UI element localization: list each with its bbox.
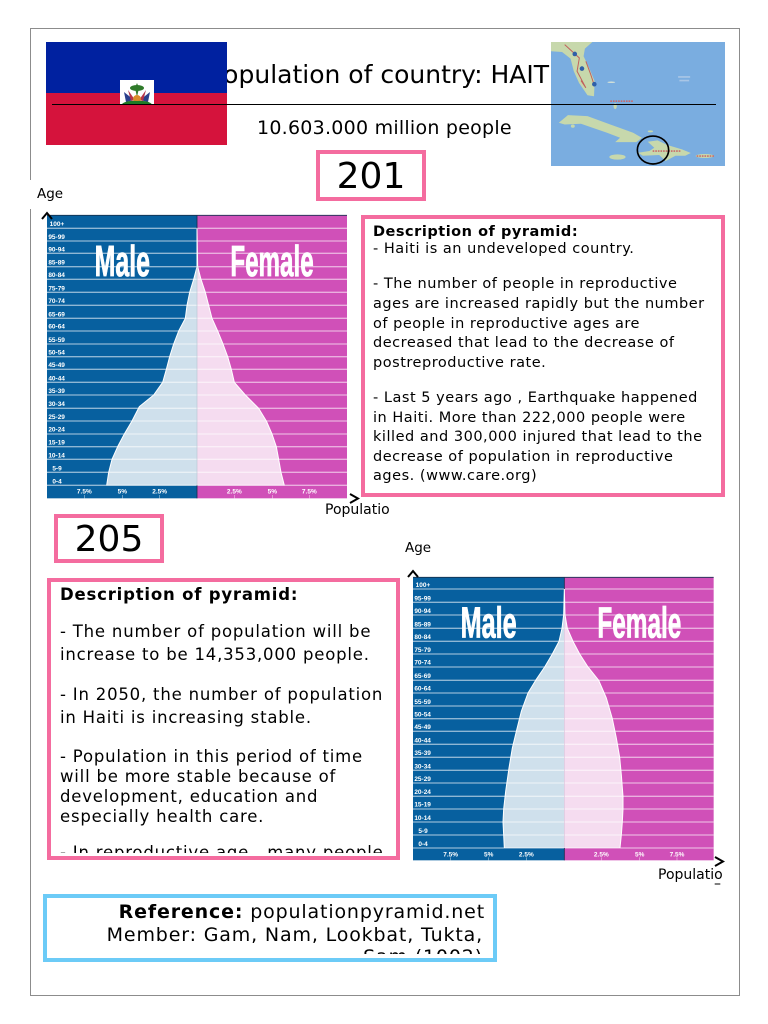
age labels: 25-29 bbox=[48, 414, 65, 421]
percent labels bbox=[77, 489, 317, 496]
percent labels: 2.5% bbox=[594, 852, 609, 859]
age labels: 70-74 bbox=[415, 660, 432, 667]
description paragraph: total bbox=[60, 622, 371, 664]
percent labels: 7.5% bbox=[302, 489, 317, 496]
arrow: population axis 2010 bbox=[350, 493, 360, 504]
age labels: 45-49 bbox=[48, 362, 65, 369]
description paragraph: earthquake: - Last 5 years ago , Earthquake happened bbox=[373, 390, 698, 406]
description paragraph: stability: will be more stable because of bbox=[60, 767, 336, 786]
female heading: Female bbox=[598, 600, 682, 648]
description paragraph: reproductive ages: ages are increased rapidly but the number bbox=[373, 296, 705, 312]
age labels: 85-89 bbox=[415, 622, 432, 629]
clipped reference text bbox=[107, 901, 485, 954]
age labels: 60-64 bbox=[48, 324, 65, 331]
age labels: 90-94 bbox=[48, 246, 65, 253]
description paragraph: earthquake bbox=[373, 390, 703, 484]
year label 2050 box: 205 bbox=[75, 519, 143, 560]
description paragraph: 2050 trend: in Haiti is increasing stable. bbox=[60, 708, 312, 727]
arrow: age axis 2010 bbox=[41, 212, 53, 220]
age labels: 5-9 bbox=[419, 828, 428, 835]
description heading 2050: Description of pyramid: bbox=[60, 585, 298, 604]
description paragraph: total: increase to be 14,353,000 people. bbox=[60, 645, 370, 664]
description paragraph: stability: development, education and bbox=[60, 787, 318, 806]
percent labels: 2.5% bbox=[519, 852, 534, 859]
age labels: 70-74 bbox=[48, 298, 65, 305]
pyramid chart 2010 bbox=[47, 214, 347, 498]
age labels bbox=[415, 582, 432, 848]
age labels: 30-34 bbox=[415, 764, 432, 771]
percent labels: 5% bbox=[484, 852, 494, 859]
age labels: 100+ bbox=[49, 221, 64, 228]
description paragraph: stability bbox=[60, 747, 363, 826]
percent labels bbox=[444, 852, 685, 859]
description paragraph: 2050 trend: - In 2050, the number of population bbox=[60, 685, 383, 704]
age labels: 5-9 bbox=[52, 465, 62, 472]
title rule bbox=[52, 104, 716, 105]
percent labels: 2.5% bbox=[152, 489, 167, 496]
male area bbox=[503, 589, 565, 848]
description paragraph: stability: - Population in this period of time bbox=[60, 747, 363, 766]
percent labels: 7.5% bbox=[670, 852, 685, 859]
age labels: 40-44 bbox=[48, 375, 65, 382]
age labels: 85-89 bbox=[48, 260, 65, 267]
age labels: 45-49 bbox=[415, 724, 432, 731]
age labels: 95-99 bbox=[48, 234, 65, 241]
axis label: age: Age bbox=[37, 186, 63, 202]
description paragraph: reproductive ages bbox=[373, 276, 705, 371]
description paragraph: reproductive ages: postreproductive rate. bbox=[373, 355, 546, 371]
age labels: 15-19 bbox=[415, 802, 432, 809]
members line: Member: Gam, Nam, Lookbat, Tukta, bbox=[107, 924, 483, 946]
age labels: 80-84 bbox=[48, 272, 65, 279]
year label 2010 box: 201 bbox=[337, 156, 405, 197]
description paragraph: stability: especially health care. bbox=[60, 807, 264, 826]
axis label: age 2050: Age bbox=[405, 540, 431, 556]
description paragraph: 2050 trend bbox=[60, 685, 383, 727]
arrow: age axis 2050 bbox=[407, 570, 419, 578]
percent labels: 5% bbox=[635, 852, 645, 859]
age labels: 90-94 bbox=[415, 608, 432, 615]
percent labels: 7.5% bbox=[444, 852, 459, 859]
age labels: 65-69 bbox=[415, 673, 432, 680]
age labels: 20-24 bbox=[415, 789, 432, 796]
age labels: 50-54 bbox=[48, 350, 65, 357]
age labels: 10-14 bbox=[415, 815, 432, 822]
description paragraph: total: - The number of population will be bbox=[60, 622, 371, 641]
age labels: 60-64 bbox=[415, 686, 432, 693]
year label 2050 box bbox=[54, 514, 164, 563]
male heading: Male bbox=[461, 600, 517, 648]
axis label: population 2050: Populatio bbox=[658, 867, 723, 883]
percent labels: 5% bbox=[117, 489, 127, 496]
age labels: 100+ bbox=[416, 582, 431, 589]
title: Population of country: HAITI bbox=[209, 60, 556, 89]
description heading 2010: Description of pyramid: bbox=[373, 224, 578, 240]
age labels: 25-29 bbox=[415, 776, 432, 783]
axis label: age bbox=[30, 180, 70, 209]
icon: Haiti flag bbox=[46, 42, 227, 145]
age labels: 55-59 bbox=[415, 699, 432, 706]
clipped description text 2050 bbox=[60, 585, 384, 853]
age labels: 55-59 bbox=[48, 337, 65, 344]
age labels: 0-4 bbox=[52, 479, 62, 486]
age labels: 65-69 bbox=[48, 311, 65, 318]
female area bbox=[565, 589, 623, 848]
description paragraph: development: - Haiti is an undeveloped country. bbox=[373, 241, 634, 257]
year label 2010 box bbox=[316, 150, 426, 201]
age labels: 0-4 bbox=[419, 841, 428, 848]
male heading: Male bbox=[94, 238, 150, 286]
age labels bbox=[48, 221, 65, 486]
male area bbox=[106, 228, 197, 485]
icon: location map bbox=[551, 42, 725, 166]
percent labels: 2.5% bbox=[227, 489, 242, 496]
age labels: 80-84 bbox=[415, 634, 432, 641]
population total: 10.603.000 million people bbox=[257, 117, 512, 139]
age labels: 20-24 bbox=[48, 427, 65, 434]
age labels: 10-14 bbox=[48, 453, 65, 460]
description paragraph: reproductive ages: decreased that lead to the decrease of bbox=[373, 335, 674, 351]
panel: description of 2050 pyramid bbox=[47, 578, 400, 860]
age labels: 30-34 bbox=[48, 401, 65, 408]
reference line: Reference: populationpyramid.net bbox=[119, 901, 485, 923]
age labels: 75-79 bbox=[415, 647, 432, 654]
description paragraph: reproductive ages: of people in reproductive ages are bbox=[373, 316, 640, 332]
description paragraph: reproductive ages: - The number of people in reproductive bbox=[373, 276, 677, 292]
percent labels: 5% bbox=[267, 489, 277, 496]
age labels: 35-39 bbox=[415, 750, 432, 757]
age labels: 40-44 bbox=[415, 738, 432, 745]
female area bbox=[197, 228, 284, 485]
age labels: 95-99 bbox=[415, 596, 432, 603]
age labels: 50-54 bbox=[415, 712, 432, 719]
description paragraph: earthquake: in Haiti. More than 222,000 people were bbox=[373, 410, 686, 426]
panel: reference and members bbox=[43, 894, 497, 962]
description paragraph: earthquake: decrease of population in reproductive bbox=[373, 449, 673, 465]
arrow: population axis 2050 bbox=[714, 856, 725, 867]
description paragraph: earthquake: killed and 300,000 injured that lead to the bbox=[373, 429, 703, 445]
description paragraph: earthquake: ages. (www.care.org) bbox=[373, 468, 537, 484]
age labels: 75-79 bbox=[48, 285, 65, 292]
panel: description of 2010 pyramid bbox=[361, 215, 725, 497]
axis label: population 2010: Populatio bbox=[325, 502, 390, 518]
age labels: 35-39 bbox=[48, 388, 65, 395]
percent labels: 7.5% bbox=[77, 489, 92, 496]
pyramid chart 2050 bbox=[413, 576, 714, 860]
age labels: 15-19 bbox=[48, 440, 65, 447]
female heading: Female bbox=[230, 238, 313, 286]
